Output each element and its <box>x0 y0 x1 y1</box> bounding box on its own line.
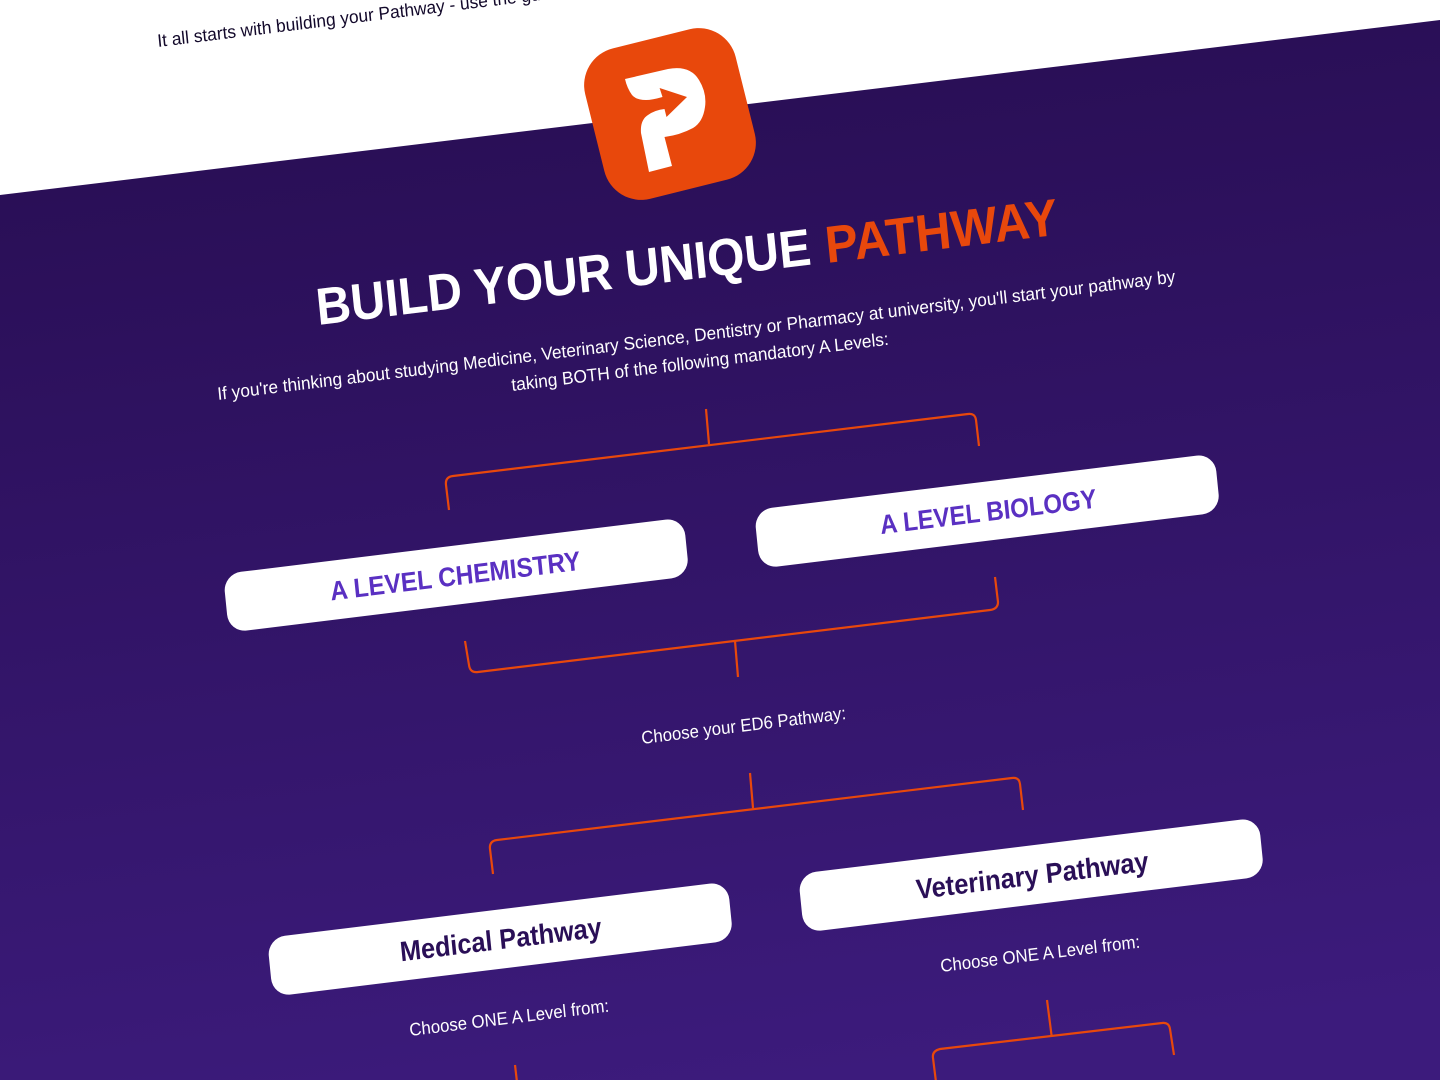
text: veterinary choose one: Choose ONE A Level from: <box>939 932 1141 976</box>
icon: Pathway logo <box>576 20 764 208</box>
button: Veterinary Pathway: Veterinary Pathway <box>915 846 1150 905</box>
intro paragraph: If you're thinking about studying Medicine, Veterinary Science, Dentistry or Pharmacy at university, you'll start your pathway by <box>216 266 1176 404</box>
connector: medical options <box>515 1065 517 1080</box>
title: PATHWAY <box>822 189 1060 275</box>
button: Medical Pathway <box>267 881 733 997</box>
button: Medical Pathway: Medical Pathway <box>398 912 603 967</box>
button: Veterinary Pathway <box>798 817 1264 933</box>
button: A Level Chemistry <box>223 517 689 633</box>
connector: to A Level choices <box>446 409 979 510</box>
title <box>313 189 1060 337</box>
connector: to pathway choices <box>490 773 1023 874</box>
connector: veterinary options <box>933 1000 1174 1080</box>
button: A Level Biology: A LEVEL BIOLOGY <box>879 484 1098 540</box>
text: choose ED6 pathway: Choose your ED6 Pathway: <box>640 703 847 748</box>
button: A Level Chemistry: A LEVEL CHEMISTRY <box>329 546 582 606</box>
text: medical choose one: Choose ONE A Level from: <box>408 996 610 1040</box>
connector: from A Levels to ED6 <box>465 577 998 677</box>
button: A Level Biology <box>754 453 1220 569</box>
title: BUILD YOUR UNIQUE <box>313 219 813 337</box>
intro paragraph: taking BOTH of the following mandatory A Levels: <box>510 329 890 395</box>
